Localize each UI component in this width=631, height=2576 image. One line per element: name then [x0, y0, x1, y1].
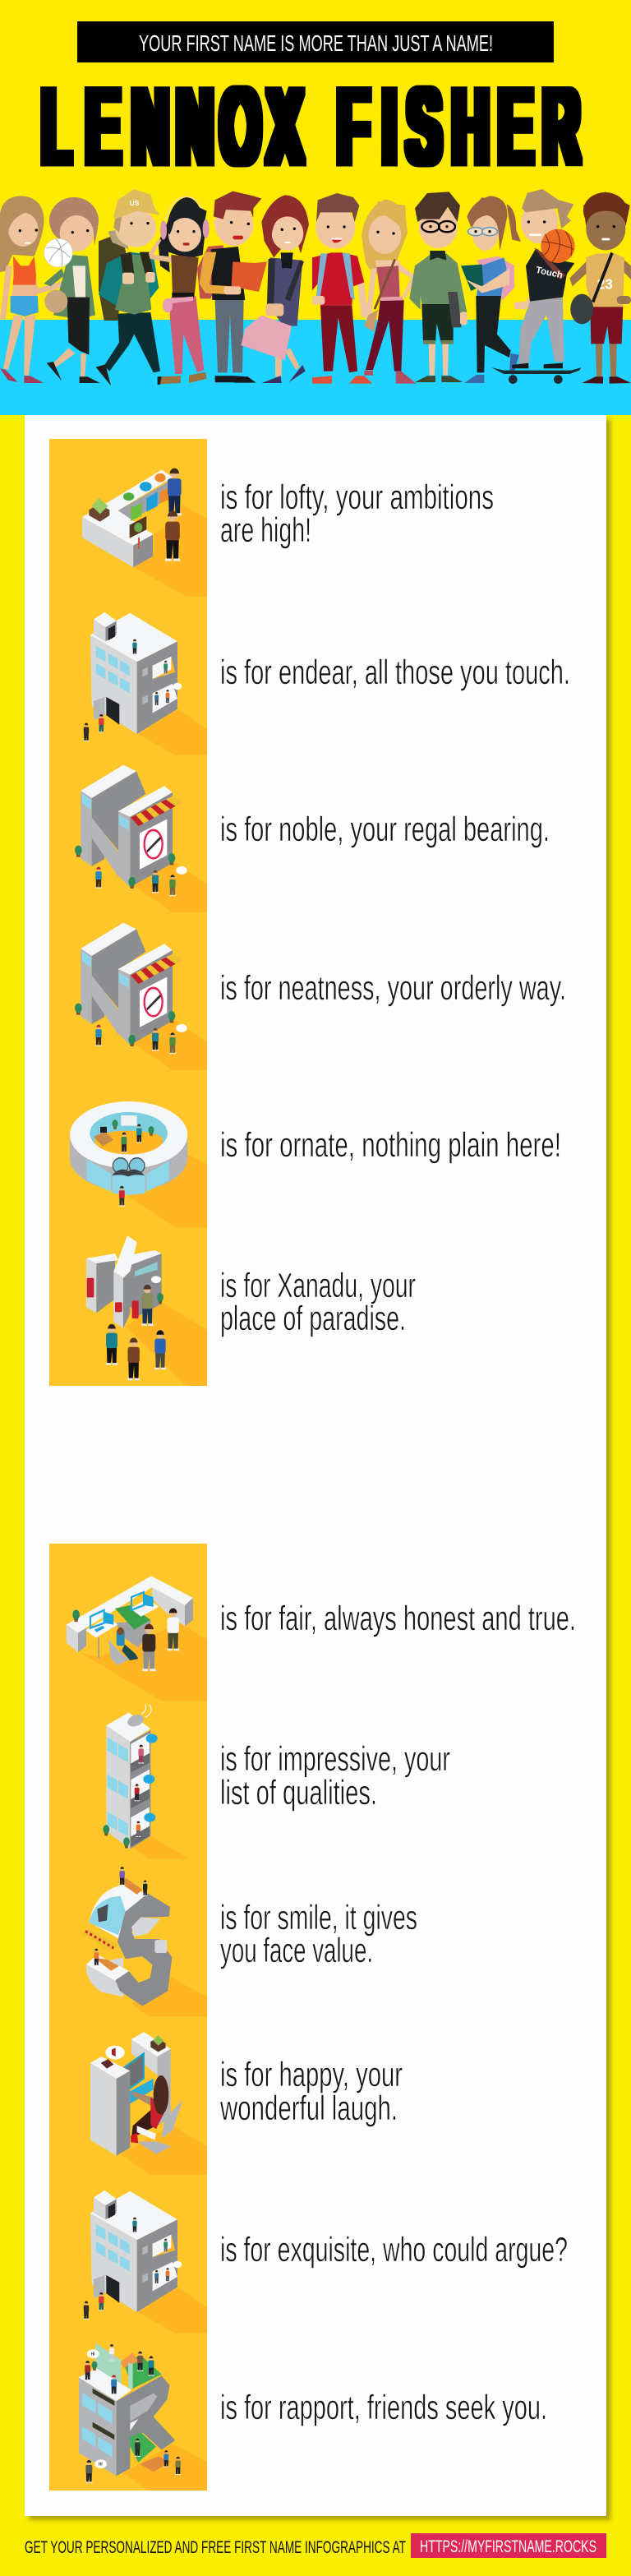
- student 3: boy in yellow cap with backpack: US: [129, 199, 140, 207]
- student 12: boy in tan tank top with bag: [541, 192, 631, 384]
- icon: letter X fire safety building: [86, 1235, 207, 1386]
- icon: letter N no-smoking shop: [75, 765, 207, 912]
- icon: letter H woman at desk: [90, 2032, 207, 2175]
- text: I line: is for impressive, your: [220, 1739, 450, 1778]
- text: S line: [220, 1898, 417, 1969]
- student 1: girl in orange top: [0, 196, 66, 383]
- icon: letter R building with greenery: HI: [91, 2352, 95, 2357]
- icon: letter E office building: [84, 612, 207, 755]
- group of students, left half: [0, 189, 309, 385]
- text: X line: place of paradise.: [220, 1299, 406, 1337]
- student 12: boy in tan tank top with bag: 23: [597, 276, 613, 293]
- footer call to action: GET YOUR PERSONALIZED AND FREE FIRST NAME INFOGRAPHICS AT: [25, 2538, 406, 2557]
- student 2: girl in green jacket with volleyball: [44, 197, 100, 383]
- icon: letter L recycling building: [82, 469, 207, 597]
- text: X line: [220, 1266, 416, 1337]
- text: I line: list of qualities.: [220, 1773, 377, 1812]
- student 10: girl with ponytail, glasses and tablet: [461, 196, 521, 383]
- text: L line: are high!: [220, 510, 311, 549]
- student 8: blonde girl: [362, 200, 417, 384]
- text: X line: is for Xanadu, your: [220, 1266, 416, 1304]
- student 11: skateboarder with basketball: [491, 189, 581, 384]
- icon: letter N no-smoking shop, repeat: [75, 923, 207, 1070]
- panel: last name letter illustrations: [49, 1544, 207, 2491]
- footer link badge: [411, 2533, 606, 2558]
- student 7: boy in red shirt: [312, 193, 372, 384]
- text: H line: [219, 2055, 403, 2127]
- text: H line: is for happy, your: [220, 2055, 403, 2094]
- student 6: girl with red bob and pink bag: [241, 195, 309, 383]
- icon: letter E office building, repeat: [84, 2191, 207, 2334]
- text: S line: is for smile, it gives: [220, 1898, 417, 1937]
- student 4: girl with black hair and headphones: [149, 196, 210, 384]
- text: L line: [220, 478, 494, 549]
- icon: letter R building with greenery: [79, 2343, 207, 2491]
- text: L line: is for lofty, your ambitions: [220, 478, 494, 516]
- icon: letter F office desks: [67, 1576, 207, 1701]
- main white panel: [25, 415, 606, 2516]
- text: S line: you face value.: [220, 1931, 373, 1969]
- student 11: skateboarder with basketball: Touch: [535, 265, 564, 280]
- student 3: boy in yellow cap with backpack: [96, 189, 170, 385]
- student 9: boy with black glasses and laptop: [409, 192, 467, 382]
- title: LENNOX FISHER: [42, 69, 579, 184]
- icon: letter O optician ring building: [70, 1101, 207, 1227]
- subtitle bar: [77, 21, 554, 62]
- icon: letter S building with awning: [81, 1867, 207, 2016]
- icon: letter R building with greenery: HI: [99, 2462, 103, 2468]
- panel: first name letter illustrations: [49, 439, 207, 1386]
- text: H line: wonderful laugh.: [219, 2089, 398, 2127]
- text: I line: [220, 1739, 450, 1812]
- icon: letter I tower: [103, 1705, 189, 1858]
- group of students, right half: [312, 189, 631, 384]
- student 5: boy in black shirt with book: [197, 192, 267, 383]
